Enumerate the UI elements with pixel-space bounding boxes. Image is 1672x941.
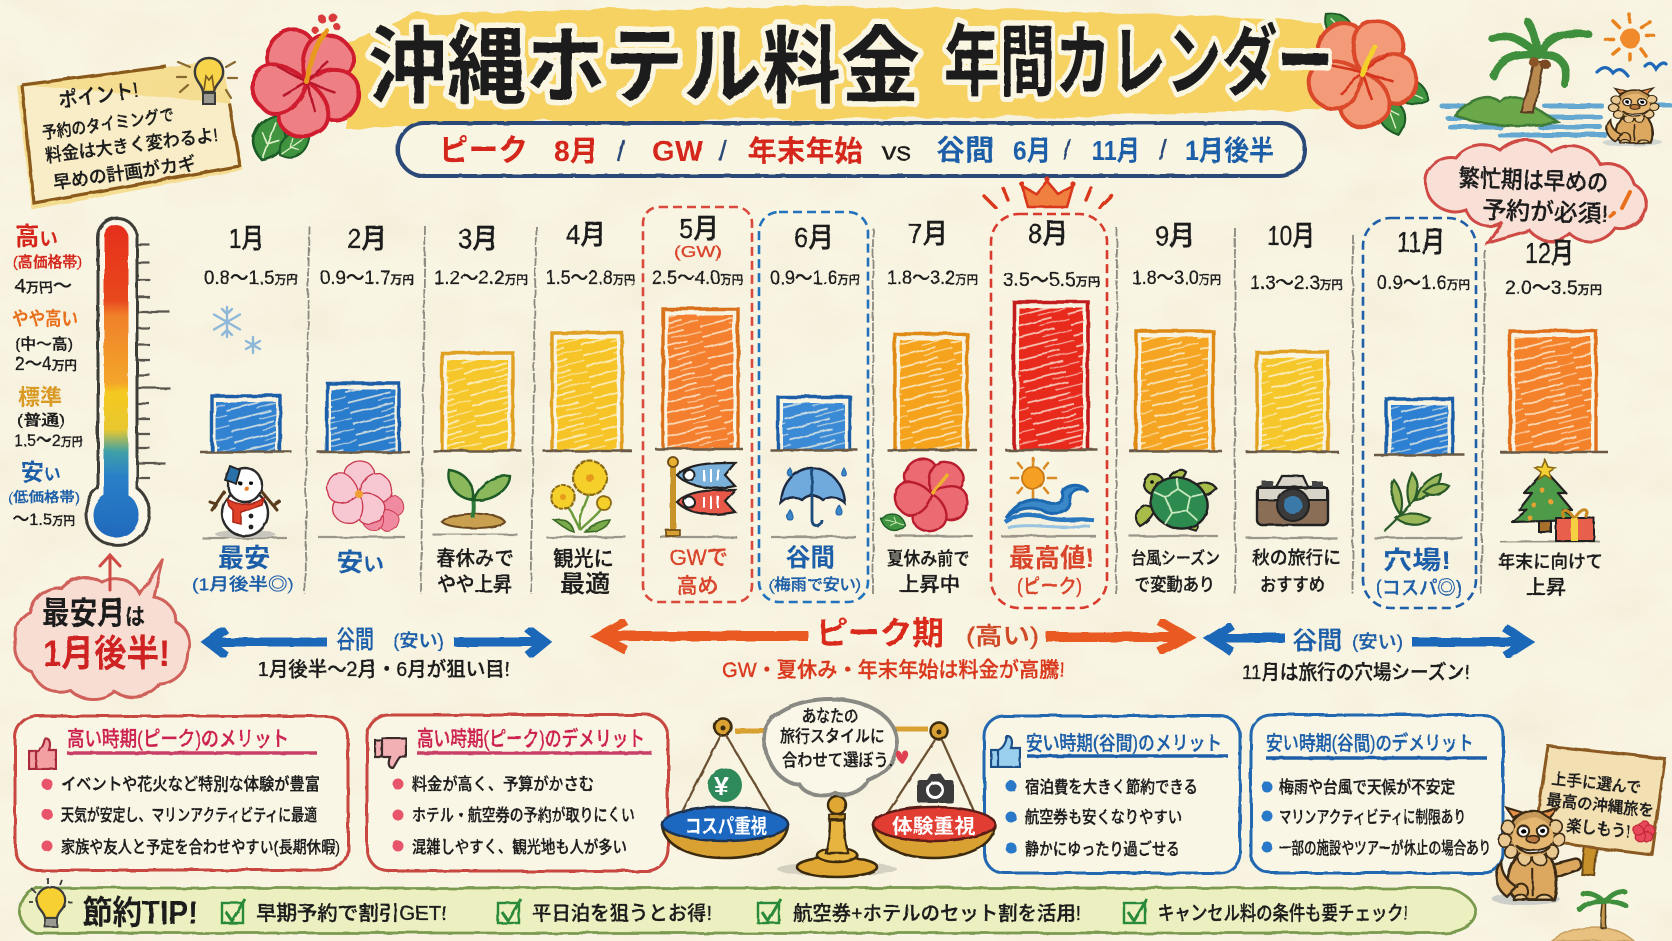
callout: busy season: 予約が必須! xyxy=(1482,197,1609,228)
arrow: low season left xyxy=(208,629,545,656)
scale labels: (高価格帯) xyxy=(13,254,82,271)
scale labels: やや高い xyxy=(12,308,78,330)
icon: birds xyxy=(1597,63,1666,76)
icon: thumbs up xyxy=(991,736,1020,767)
icon: umbrella xyxy=(781,468,846,526)
speech bubble: 旅行スタイルに xyxy=(780,727,885,746)
icon: July hibiscus xyxy=(878,453,973,534)
label: low season 1: (安い) xyxy=(393,631,444,651)
scale labels: (普通) xyxy=(17,412,65,429)
month labels: 11月 xyxy=(1397,227,1445,259)
demerits text: ホテル・航空券の予約が取りにくい xyxy=(412,805,635,825)
caption: April: 最適 xyxy=(560,571,610,598)
speech bubble xyxy=(764,699,908,795)
panel: low-season demerits: マリンアクティビティに制限あり xyxy=(1279,808,1466,827)
caption: October: 秋の旅行に xyxy=(1252,548,1341,568)
scale labels: 標準 xyxy=(18,385,62,410)
month labels: 3月 xyxy=(458,223,498,254)
panel: low-season demerits: 梅雨や台風で天候が不安定 xyxy=(1279,777,1455,797)
price ranges: 0.9〜1.6万円 xyxy=(1377,273,1470,294)
left pan: ¥ xyxy=(714,771,729,801)
icon: palm island xyxy=(1442,22,1672,135)
icon: orange hibiscus xyxy=(1302,5,1434,138)
callout: wooden sign xyxy=(1534,746,1665,876)
price ranges: 1.5〜2.8万円 xyxy=(546,268,635,289)
subtitle pill: vs xyxy=(882,136,911,166)
arrow: low season right xyxy=(1211,625,1527,656)
price ranges: 0.9〜1.6万円 xyxy=(770,268,860,289)
caption: April xyxy=(553,548,614,598)
note text: 予約のタイミングで xyxy=(41,106,175,143)
frame: August xyxy=(991,214,1107,608)
subtitle pill: 1月後半 xyxy=(1185,135,1274,166)
demerits text: 高い時期(ピーク)のデメリット xyxy=(417,727,645,751)
caption: July: 夏休み前で xyxy=(887,549,970,569)
merits text: 安い時期(谷間)のメリット xyxy=(1026,732,1222,755)
merits text xyxy=(1006,732,1228,859)
scale labels: 2〜4万円 xyxy=(15,354,77,374)
merits text: 航空券も安くなりやすい xyxy=(1025,808,1182,827)
icon: sun and wave xyxy=(1005,458,1094,528)
note paper xyxy=(17,60,243,210)
caption: May xyxy=(670,545,728,598)
bar: February xyxy=(327,383,399,452)
month captions xyxy=(192,543,1603,599)
tip heading: 節約TIP! xyxy=(83,894,198,931)
label: low season 1: 1月後半〜2月・6月が狙い目! xyxy=(258,658,510,681)
caption: March: やや上昇 xyxy=(437,573,512,596)
note text: 早めの計画がカギ xyxy=(52,152,197,193)
subtitle pill: / xyxy=(1159,134,1167,165)
icon baselines xyxy=(202,534,1600,542)
callout: busy season xyxy=(1425,140,1646,243)
icon: tip bulb xyxy=(29,878,72,927)
tip items: 早期予約で割引GET! xyxy=(256,902,447,925)
bar: July xyxy=(895,334,967,450)
label: low season 2: 谷間 xyxy=(1292,627,1342,655)
season arrows xyxy=(208,615,1527,684)
caption: September: 台風シーズン xyxy=(1131,548,1220,568)
icon: sea turtle xyxy=(1136,470,1216,536)
caption: December: 年末に向けて xyxy=(1498,552,1603,572)
icon: christmas tree and gift xyxy=(1512,460,1594,541)
merits text: 静かにゆったり過ごせる xyxy=(1025,840,1180,859)
frame: May xyxy=(643,207,752,602)
title banner xyxy=(345,6,1336,128)
price ranges: 2.0〜3.5万円 xyxy=(1505,278,1602,299)
caption: October: おすすめ xyxy=(1260,575,1325,595)
caption: July: 上昇中 xyxy=(899,573,960,596)
heading: title text xyxy=(368,18,1333,114)
note text: 料金は大きく変わるよ! xyxy=(44,125,219,166)
caption: March: 春休みで xyxy=(436,547,514,570)
month labels: 9月 xyxy=(1155,220,1195,251)
panel: saving tips xyxy=(20,878,1476,933)
caption: December xyxy=(1498,552,1603,599)
panel: low-season demerits: 一部の施設やツアーが休止の場合あり xyxy=(1279,838,1491,858)
month labels: 8月 xyxy=(1028,218,1068,249)
left pan: コスパ重視 xyxy=(685,815,767,838)
icon: light bulb xyxy=(177,58,237,104)
price ranges: 3.5〜5.5万円 xyxy=(1003,270,1100,291)
icon: leaf branch xyxy=(1384,473,1449,531)
price ranges: 0.9〜1.7万円 xyxy=(320,268,414,289)
bar: October xyxy=(1257,352,1328,451)
icon: small shisa xyxy=(1602,88,1662,146)
price ranges: 2.5〜4.0万円 xyxy=(652,268,743,289)
caption: March xyxy=(436,547,514,596)
callout: cheapest month xyxy=(15,559,190,700)
icon: large shisa xyxy=(1492,808,1581,905)
scale labels: 4万円〜 xyxy=(15,276,72,296)
caption: January: (1月後半◎) xyxy=(192,575,294,594)
subtitle pill: / xyxy=(617,135,625,166)
subtitle pill: GW xyxy=(652,136,704,168)
icon: red hibiscus xyxy=(246,14,367,165)
caption: December: 上昇 xyxy=(1526,576,1566,599)
icon: crown xyxy=(984,176,1112,208)
scale stand xyxy=(777,796,897,877)
merits text: イベントや花火など特別な体験が豊富 xyxy=(61,774,320,794)
panel: low-season demerits: 安い時期(谷間)のデメリット xyxy=(1266,731,1474,755)
month labels: (GW) xyxy=(674,244,722,261)
caption: February: 安い xyxy=(337,549,384,577)
caption: April: 観光に xyxy=(553,548,614,571)
icon: koinobori xyxy=(666,457,735,536)
caption: August: 最高値! xyxy=(1009,543,1094,573)
month labels: 2月 xyxy=(347,223,387,254)
tip items xyxy=(222,899,1408,925)
caption: May: GWで xyxy=(670,545,728,570)
label: peak season: GW・夏休み・年末年始は料金が高騰! xyxy=(722,659,1065,682)
panel: peak demerits xyxy=(367,715,668,871)
scale labels: (中〜高) xyxy=(15,336,73,353)
month labels xyxy=(229,213,1574,270)
month labels: 6月 xyxy=(794,222,834,253)
icon: snowflakes xyxy=(214,307,260,353)
arrow: peak season xyxy=(599,621,1187,652)
heading: title text: 沖縄ホテル料金 xyxy=(368,20,920,114)
highlight frames xyxy=(643,207,1476,608)
left pan xyxy=(662,718,788,858)
caption: May: 高め xyxy=(677,575,718,598)
merits text: 家族や友人と予定を合わせやすい(長期休暇) xyxy=(61,838,340,857)
caption: June: 谷間 xyxy=(786,544,835,572)
subtitle pill: 年末年始 xyxy=(748,135,863,168)
caption: August xyxy=(1009,543,1094,598)
caption: January: 最安 xyxy=(218,543,270,573)
merits text: 高い時期(ピーク)のメリット xyxy=(67,728,289,751)
bar: March xyxy=(442,353,513,452)
right pan: 体験重視 xyxy=(892,815,975,838)
bar chart: monthly prices xyxy=(200,302,1608,455)
heading: title text: 年間カレンダー xyxy=(944,18,1333,106)
caption: November: (コスパ◎) xyxy=(1376,577,1462,599)
icon: snowman xyxy=(210,466,279,538)
bar: January xyxy=(212,396,280,452)
price ranges: 1.8〜3.0万円 xyxy=(1132,268,1221,289)
caption: January xyxy=(192,543,294,594)
callout: wooden sign: 最高の沖縄旅を xyxy=(1546,791,1655,820)
icon: small palm xyxy=(1551,891,1634,941)
price ranges: 0.8〜1.5万円 xyxy=(204,268,298,289)
subtitle pill xyxy=(398,123,1305,176)
callout: cheapest month: 1月後半! xyxy=(43,633,170,674)
note text: ポイント! xyxy=(57,79,140,113)
month labels: 5月 xyxy=(679,213,719,244)
label: peak season xyxy=(722,615,1065,682)
demerits text xyxy=(392,727,652,857)
arrow: up to thermometer xyxy=(100,555,120,590)
label: peak season: ピーク期 xyxy=(816,615,944,651)
subtitle pill: ピーク xyxy=(439,133,528,168)
tip items: キャンセル料の条件も要チェック! xyxy=(1158,902,1408,925)
right pan xyxy=(873,722,995,858)
price ranges xyxy=(204,268,1602,299)
caption: June: (梅雨で安い) xyxy=(769,576,861,594)
frame: November xyxy=(1363,218,1476,608)
bar: August xyxy=(1014,302,1088,450)
panel: balance scale xyxy=(662,699,995,877)
icon: rape blossoms xyxy=(551,461,611,532)
tip items: 平日泊を狙うとお得! xyxy=(532,902,712,925)
caption: August: (ピーク) xyxy=(1017,575,1082,598)
merits text: 天気が安定し、マリンアクティビティに最適 xyxy=(61,805,317,825)
subtitle pill: / xyxy=(719,135,727,166)
scale labels: 安い xyxy=(21,459,61,485)
subtitle pill: 6月 xyxy=(1013,135,1051,166)
scale labels: 1.5〜2万円 xyxy=(14,431,83,450)
bar: September xyxy=(1136,331,1213,451)
icon: sun xyxy=(1606,15,1654,60)
panel: low-season demerits xyxy=(1251,715,1503,873)
caption: September: で変動あり xyxy=(1134,575,1215,595)
caption: September xyxy=(1131,548,1220,595)
icon: thumbs down xyxy=(375,738,406,768)
bar: May xyxy=(663,309,738,450)
subtitle pill: / xyxy=(1063,134,1071,165)
frame: June xyxy=(759,212,868,602)
label: low season 2 xyxy=(1242,627,1470,684)
month column dividers xyxy=(305,226,1485,594)
caption: November xyxy=(1376,547,1462,599)
price ranges: 1.2〜2.2万円 xyxy=(434,268,528,289)
caption: November: 穴場! xyxy=(1383,547,1451,575)
callout: busy season: 繁忙期は早めの xyxy=(1458,165,1609,197)
callout: point note card xyxy=(17,58,243,210)
callout: wooden sign: 楽しもう! xyxy=(1566,816,1631,842)
demerits text: 混雑しやすく、観光地も人が多い xyxy=(412,837,627,857)
merits text xyxy=(42,728,340,857)
icon: sprout xyxy=(442,470,510,528)
scale labels xyxy=(8,223,83,529)
callout: wooden sign: 上手に選んで xyxy=(1551,770,1642,797)
speech bubble: 合わせて選ぼう. xyxy=(782,751,893,770)
caption: October xyxy=(1252,548,1341,595)
month labels: 1月 xyxy=(229,223,264,254)
scale labels: 〜1.5万円 xyxy=(13,510,75,529)
price ranges: 1.8〜3.2万円 xyxy=(887,268,978,289)
month labels: 12月 xyxy=(1525,238,1574,270)
scale labels: 高い xyxy=(15,223,58,251)
label: peak season: (高い) xyxy=(966,623,1039,650)
bar: December xyxy=(1510,331,1596,452)
month labels: 7月 xyxy=(908,218,948,249)
icon: cherry blossom xyxy=(323,461,406,535)
tip items: 航空券+ホテルのセット割を活用! xyxy=(793,902,1081,925)
merits text: 宿泊費を大きく節約できる xyxy=(1025,778,1198,797)
caption: July xyxy=(887,549,970,596)
price ranges: 1.3〜2.3万円 xyxy=(1250,273,1343,294)
bar baselines xyxy=(200,449,1608,455)
bar: June xyxy=(778,397,850,450)
speech bubble: あなたの xyxy=(802,707,858,726)
note text xyxy=(41,79,219,193)
icon: camera xyxy=(1257,476,1328,525)
caption: June xyxy=(769,544,861,594)
bar: April xyxy=(552,333,622,452)
bar: November xyxy=(1386,399,1453,455)
callout: cheapest month: 最安月は xyxy=(42,595,145,631)
demerits text: 料金が高く、予算がかさむ xyxy=(412,774,594,794)
subtitle pill: 8月 xyxy=(554,136,598,168)
label: low season 1 xyxy=(258,626,510,681)
subtitle pill: 11月 xyxy=(1092,135,1140,166)
scale labels: (低価格帯) xyxy=(8,489,80,505)
subtitle pill: 谷間 xyxy=(936,134,994,167)
icon: thumbs up xyxy=(29,738,56,769)
panel: low-season merits xyxy=(984,716,1240,873)
panel: peak merits xyxy=(15,716,348,870)
label: low season 2: (安い) xyxy=(1352,632,1403,652)
month labels: 4月 xyxy=(566,219,606,250)
thermometer tube xyxy=(85,219,170,545)
month labels: 10月 xyxy=(1267,220,1315,251)
chart: price thermometer xyxy=(8,219,170,545)
label: low season 1: 谷間 xyxy=(336,626,374,654)
label: low season 2: 11月は旅行の穴場シーズン! xyxy=(1242,661,1470,684)
